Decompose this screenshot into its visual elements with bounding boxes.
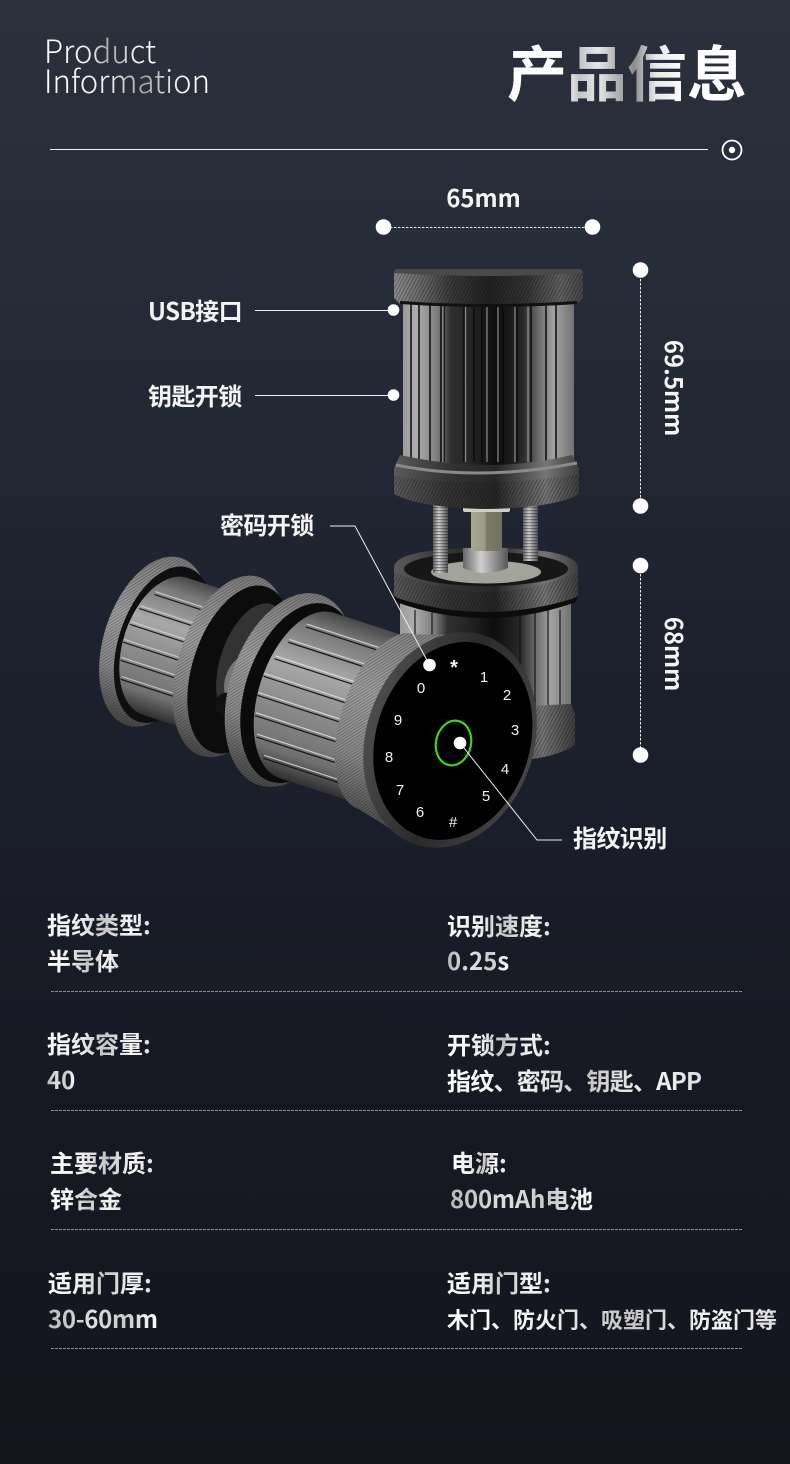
spec: fingerprint type: 半导体 xyxy=(47,942,119,977)
height dimension 68mm xyxy=(633,558,693,763)
height dimension 68mm: 68mm xyxy=(658,617,693,691)
fingerprint sensor ring xyxy=(432,717,475,769)
keypad digits: 2 xyxy=(503,687,511,704)
spec: door thickness: 适用门厚: xyxy=(48,1264,152,1299)
spec: fingerprint type: 指纹类型: xyxy=(47,906,151,941)
spec: recognition speed: 识别速度: xyxy=(447,907,551,942)
keypad digits: 9 xyxy=(394,712,402,729)
spec: unlock methods: 开锁方式: xyxy=(447,1026,551,1061)
upper cylinder top cap xyxy=(394,269,583,307)
threaded rods xyxy=(433,505,538,573)
callout: fingerprint recognition: 指纹识别 xyxy=(573,819,667,854)
spec: fingerprint capacity: 指纹容量: xyxy=(47,1025,151,1060)
spec: main material: 锌合金 xyxy=(50,1180,122,1215)
callout: key unlock: 钥匙开锁 xyxy=(148,377,242,412)
callout: USB port xyxy=(148,292,399,327)
spec: unlock methods xyxy=(447,1026,702,1097)
product: standing lock xyxy=(394,269,583,762)
keypad digits xyxy=(385,657,519,831)
keypad digits: 7 xyxy=(396,782,404,799)
upper cylinder body xyxy=(403,300,574,468)
spec: unlock methods: 指纹、密码、钥匙、APP xyxy=(447,1062,702,1097)
height dimension 69.5mm xyxy=(633,262,693,514)
keypad digits: 5 xyxy=(482,788,490,805)
callout: key unlock xyxy=(148,377,399,412)
height dimension 69.5mm: 69.5mm xyxy=(658,340,693,436)
keypad digits: 3 xyxy=(511,722,519,739)
spec: power supply: 800mAh电池 xyxy=(450,1180,593,1215)
keypad digits: 1 xyxy=(480,669,488,686)
keypad digits: 0 xyxy=(417,680,425,697)
lower cylinder xyxy=(394,505,578,762)
spec: door thickness xyxy=(48,1264,158,1335)
spec: power supply: 电源: xyxy=(451,1144,507,1179)
callout: password unlock: 密码开锁 xyxy=(220,506,314,541)
spec: power supply xyxy=(450,1144,593,1215)
callout: fingerprint recognition xyxy=(454,737,667,854)
keypad digits: 8 xyxy=(385,749,393,766)
spec: main material xyxy=(50,1144,154,1215)
spec: fingerprint capacity xyxy=(47,1025,151,1096)
spec: fingerprint type xyxy=(47,906,151,977)
keypad digits: 4 xyxy=(501,761,509,778)
spec: fingerprint capacity: 40 xyxy=(47,1061,75,1096)
keypad digits: # xyxy=(449,814,458,831)
lock barrel xyxy=(72,524,564,871)
product: lying lock with keypad xyxy=(72,524,564,871)
english heading: Information xyxy=(44,57,210,103)
upper cylinder bottom ring xyxy=(394,455,579,509)
spec: door types: 适用门型: xyxy=(447,1264,551,1299)
header divider with target icon xyxy=(50,140,742,160)
english heading xyxy=(44,27,210,103)
english heading: Product xyxy=(44,27,156,73)
spec: recognition speed xyxy=(447,907,551,977)
spec: door thickness: 30-60mm xyxy=(48,1300,158,1335)
callout: password unlock xyxy=(220,506,436,671)
title: 产品信息 xyxy=(507,27,747,114)
width dimension 65mm xyxy=(376,179,600,235)
width dimension 65mm: 65mm xyxy=(446,179,521,214)
callout: USB port: USB接口 xyxy=(148,292,242,327)
spec: main material: 主要材质: xyxy=(50,1144,154,1179)
spec: door types: 木门、防火门、吸塑门、防盗门等 xyxy=(447,1303,777,1335)
spec: recognition speed: 0.25s xyxy=(447,942,509,977)
spec: door types xyxy=(447,1264,777,1335)
keypad digits: 6 xyxy=(416,804,424,821)
keypad digits: * xyxy=(450,657,458,679)
